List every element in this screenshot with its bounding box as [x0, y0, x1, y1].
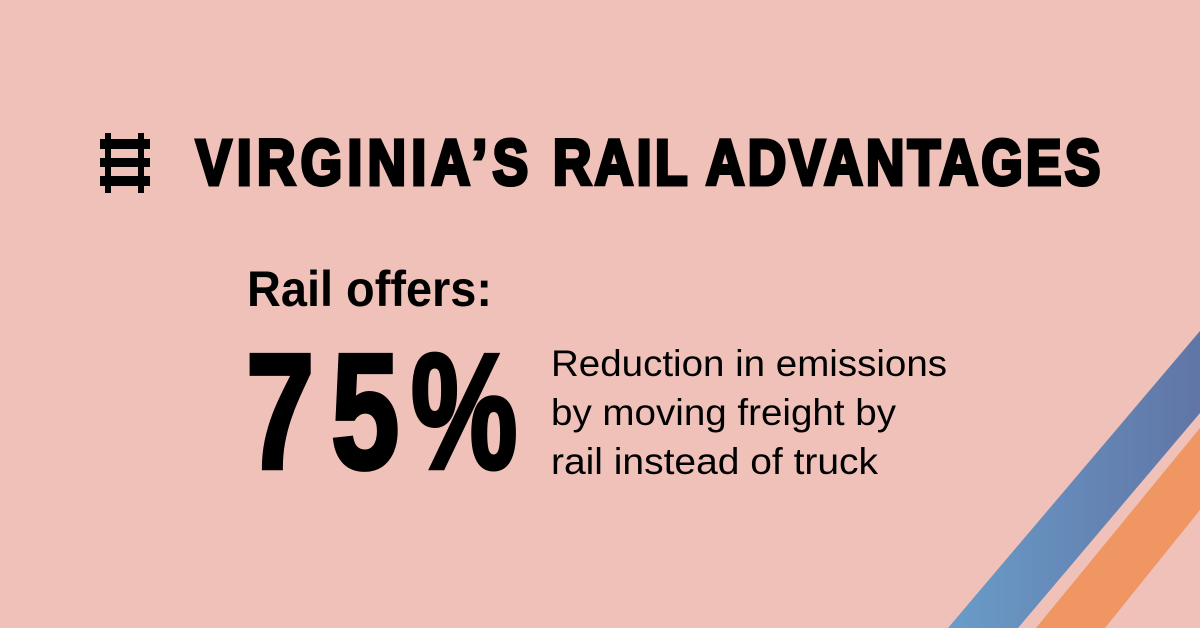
statistic description: Reduction in emissions [551, 343, 947, 384]
statistic description [551, 343, 947, 482]
big statistic: 75%: 7 [246, 320, 314, 503]
diagonal stripe: blue [948, 331, 1200, 628]
statistic description: rail instead of truck [551, 441, 879, 482]
title: RAIL [553, 128, 687, 199]
big statistic: 75%: % [411, 321, 517, 503]
big statistic: 75%: 5 [331, 320, 399, 503]
statistic description: by moving freight by [551, 392, 897, 433]
title: ADVANTAGES [706, 128, 1100, 199]
icon: railroad tracks [100, 133, 150, 193]
title: VIRGINIA’S [196, 128, 528, 199]
title [196, 128, 1100, 199]
big statistic: 75% [246, 320, 517, 503]
diagonal stripe: orange [1036, 428, 1200, 628]
subheading: rail offers: Rail offers: [247, 261, 492, 317]
